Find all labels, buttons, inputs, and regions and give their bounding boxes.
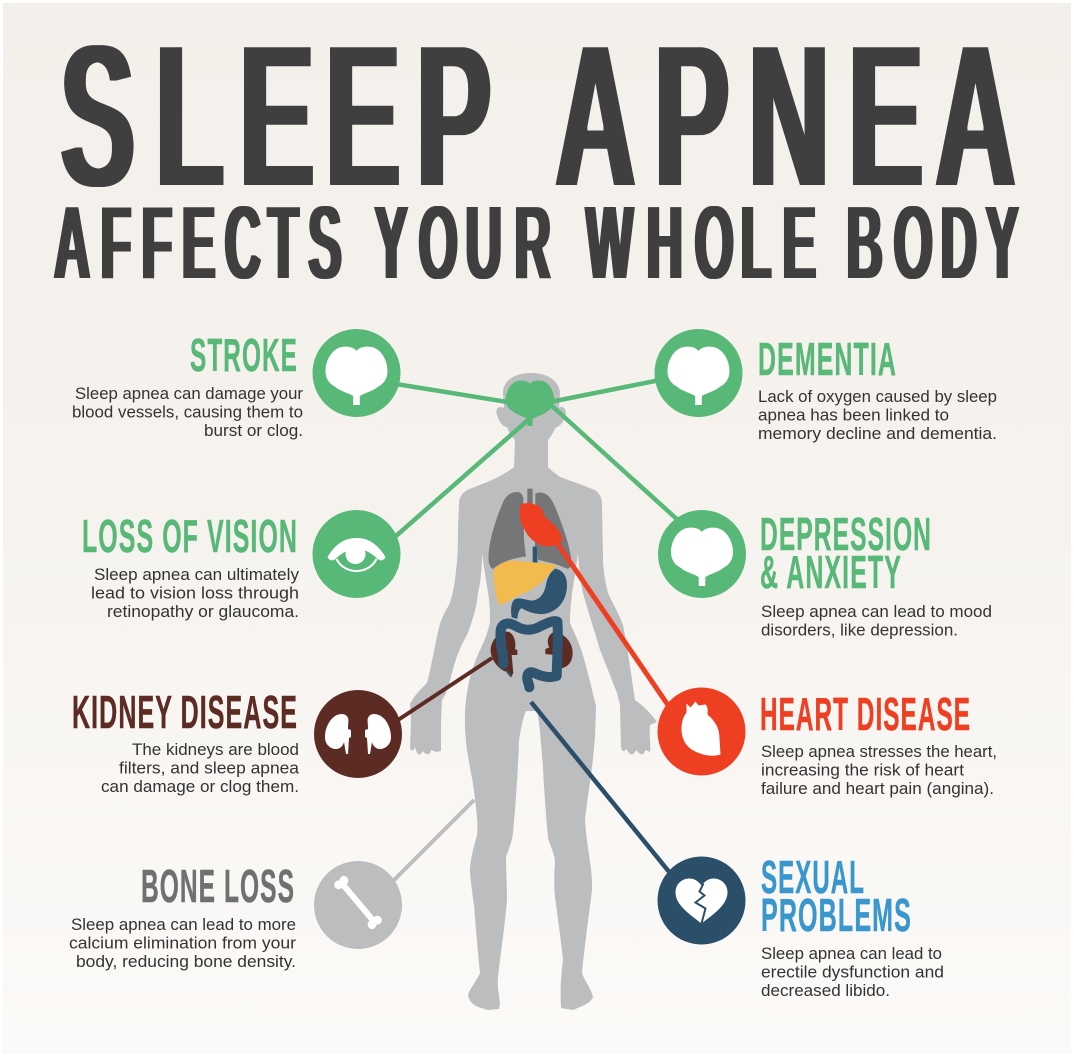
text: heart description: failure and heart pain (angina).: [761, 780, 994, 798]
icon: bone: [314, 861, 402, 949]
connector: bone loss: [392, 800, 474, 882]
text: heart description: [761, 743, 997, 798]
text: depression description: disorders, like depression.: [761, 622, 958, 640]
text: stroke description: Sleep apnea can damage your: [75, 385, 304, 403]
rectum detail: [506, 670, 512, 677]
text: loss of vision description: Sleep apnea can ultimately: [94, 566, 300, 584]
internal organs: [488, 489, 573, 687]
text: stroke description: blood vessels, causing them to: [72, 404, 303, 422]
heading: kidney disease: KIDNEY DISEASE: [72, 686, 298, 738]
heading: depression and anxiety: DEPRESSION: [760, 508, 932, 560]
text: dementia description: apnea has been linked to: [758, 406, 949, 424]
icon: vision eye: [312, 510, 400, 598]
text: kidney description: The kidneys are blood: [132, 741, 299, 759]
text: loss of vision description: retinopathy or glaucoma.: [107, 603, 299, 621]
connector: dementia: [550, 380, 660, 402]
icon: broken heart: [658, 856, 746, 944]
text: heart description: Sleep apnea stresses the heart,: [761, 743, 997, 761]
icon: stroke brain: [312, 329, 400, 417]
heading: sexual problems: PROBLEMS: [761, 889, 912, 941]
heading: dementia: DEMENTIA: [758, 333, 897, 385]
text: bone loss description: body, reducing bone density.: [76, 953, 296, 971]
connector: sexual problems: [531, 702, 670, 873]
text: loss of vision description: lead to vision loss through: [91, 584, 299, 602]
text: depression description: [761, 603, 992, 640]
heart marker: [520, 503, 563, 546]
heading: bone loss: BONE LOSS: [141, 860, 295, 912]
connector: loss of vision: [396, 420, 528, 536]
colon: [500, 621, 558, 687]
text: kidney description: can damage or clog them.: [101, 778, 299, 796]
text: stroke description: [72, 385, 304, 440]
connector: depression and anxiety: [552, 406, 680, 522]
text: sexual problems description: [761, 945, 944, 1000]
text: kidney description: [101, 741, 300, 796]
body brain marker: [506, 380, 554, 426]
icon: kidneys: [314, 690, 402, 778]
heading: depression and anxiety: & ANXIETY: [760, 546, 902, 598]
text: heart description: increasing the risk of heart: [761, 762, 964, 780]
title: sleep apnea: SLEEP APNEA: [60, 2, 1016, 232]
human body silhouette: [410, 373, 657, 1010]
text: bone loss description: Sleep apnea can lead to more: [71, 916, 296, 934]
heading: sexual problems: SEXUAL: [761, 851, 865, 903]
heading: sexual problems: [761, 851, 912, 941]
icon: heart: [658, 688, 746, 776]
connector: kidney disease: [398, 658, 492, 720]
text: bone loss description: calcium elimination from your: [69, 934, 297, 952]
text: loss of vision description: [91, 566, 300, 621]
text: kidney description: filters, and sleep apnea: [119, 760, 300, 778]
heading: loss of vision: LOSS OF VISION: [82, 510, 298, 562]
subtitle: affects your whole body: AFFECTS YOUR WHOLE BODY: [54, 183, 1019, 302]
esophagus: [533, 547, 538, 564]
icon: dementia brain: [654, 329, 742, 417]
kidney right: [545, 633, 573, 668]
left lung: [488, 492, 526, 569]
right lung: [535, 492, 571, 569]
text: depression description: Sleep apnea can lead to mood: [761, 603, 992, 621]
text: sexual problems description: decreased libido.: [761, 982, 890, 1000]
text: dementia description: memory decline and dementia.: [758, 425, 997, 443]
text: dementia description: [758, 388, 997, 443]
icon: depression brain: [658, 510, 746, 598]
text: sexual problems description: Sleep apnea can lead to: [761, 945, 942, 963]
text: sexual problems description: erectile dysfunction and: [761, 964, 944, 982]
heading: depression and anxiety: [760, 508, 932, 598]
text: bone loss description: [69, 916, 297, 971]
text: dementia description: Lack of oxygen caused by sleep: [758, 388, 997, 406]
connector: stroke: [396, 384, 520, 404]
connector: heart disease: [555, 540, 670, 708]
trachea: [527, 489, 533, 505]
stomach: [511, 569, 567, 619]
heading: stroke: STROKE: [190, 329, 298, 381]
kidney left: [491, 632, 517, 677]
liver: [493, 561, 557, 605]
text: stroke description: burst or clog.: [204, 422, 303, 440]
